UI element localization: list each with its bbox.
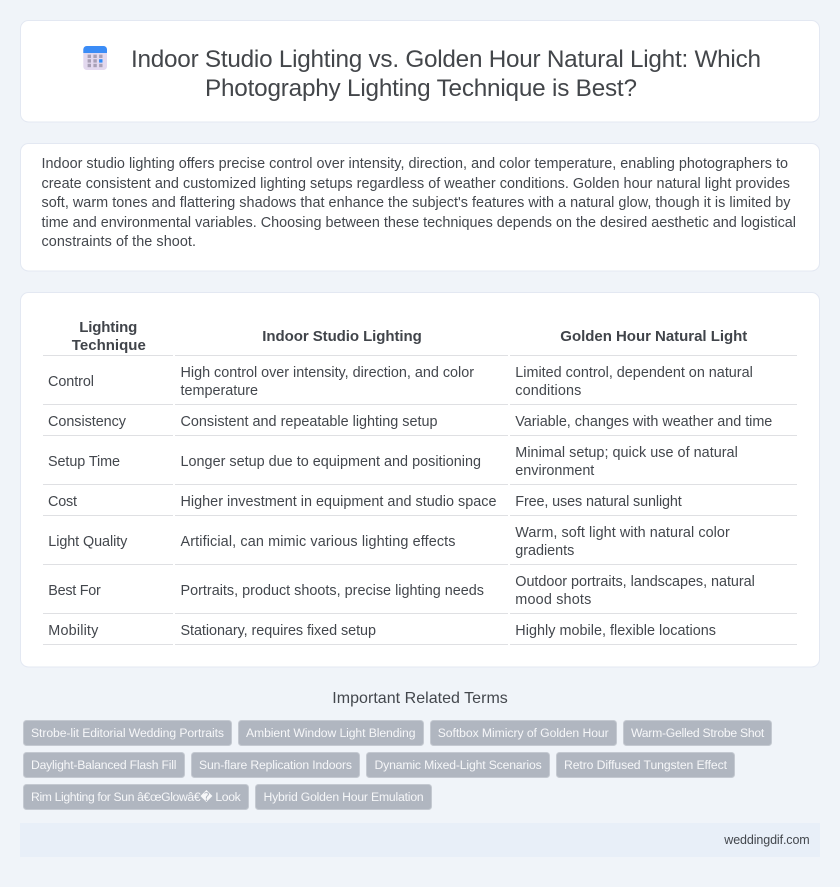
- panel: introduction text: constraints of the shoot.: [42, 234, 196, 250]
- title: Photography Lighting Technique is Best?: [205, 75, 637, 102]
- heading: important related terms: Important Related Terms: [332, 690, 508, 707]
- row: setup time: Minimal setup; quick use of natural: [515, 445, 738, 461]
- icon: calendar: [83, 46, 107, 70]
- row: control: conditions: [515, 383, 581, 399]
- row: consistency: Consistency: [48, 414, 127, 430]
- row: control: Control: [48, 374, 94, 390]
- tag: [430, 720, 616, 746]
- row: setup time: Longer setup due to equipment and positioning: [180, 454, 481, 470]
- row: consistency: [48, 414, 772, 430]
- tag: Sun-flare Replication Indoors: [199, 758, 352, 772]
- related terms tags: [24, 720, 772, 810]
- tag: [238, 720, 424, 746]
- row: mobility: Mobility: [48, 623, 99, 639]
- tag: [366, 752, 550, 778]
- row: mobility: [48, 623, 716, 639]
- row: light quality: Light Quality: [48, 534, 128, 550]
- tag: [624, 720, 772, 746]
- panel: introduction text: [20, 144, 820, 271]
- tag: [192, 752, 360, 778]
- tag: Retro Diffused Tungsten Effect: [564, 758, 728, 772]
- row: cost: Higher investment in equipment and studio space: [180, 494, 496, 510]
- tag: [24, 720, 232, 746]
- row: consistency: Variable, changes with weather and time: [515, 414, 772, 430]
- row: control: Limited control, dependent on natural: [515, 365, 753, 381]
- tag: Strobe-lit Editorial Wedding Portraits: [31, 726, 224, 740]
- row: cost: [48, 494, 682, 510]
- row: setup time: environment: [515, 463, 594, 479]
- tag: Softbox Mimicry of Golden Hour: [438, 726, 609, 740]
- tag: [556, 752, 734, 778]
- tag: Warm-Gelled Strobe Shot: [631, 726, 765, 740]
- row: light quality: Artificial, can mimic various lighting effects: [180, 534, 456, 550]
- tag: Hybrid Golden Hour Emulation: [264, 790, 424, 804]
- row: control: [48, 365, 753, 399]
- panel: introduction text: create consistent and customized lighting setups regardless of weather conditions. Golden hour natural light provides: [42, 176, 790, 192]
- table header row: Technique: [72, 337, 146, 354]
- tag: [256, 784, 432, 810]
- row: best for: Outdoor portraits, landscapes, natural: [515, 574, 755, 590]
- row: consistency: Consistent and repeatable lighting setup: [180, 414, 438, 430]
- row: mobility: Highly mobile, flexible locations: [515, 623, 716, 639]
- panel: header: [20, 20, 820, 122]
- row: light quality: [48, 525, 730, 559]
- panel: introduction text: time and environmental variables. Choosing between these techniques depends on the desired aesthetic and logistical: [42, 215, 796, 231]
- row: cost: Free, uses natural sunlight: [515, 494, 682, 510]
- row: cost: Cost: [48, 494, 77, 510]
- row: control: temperature: [180, 383, 258, 399]
- panel: introduction text: soft, warm tones and flattering shadows that enhance the subject's features with a natural glow, though it is limited by: [42, 195, 791, 211]
- footer bar: weddingdif.com: [723, 833, 810, 847]
- row: light quality: Warm, soft light with natural color: [515, 525, 730, 541]
- tag: Ambient Window Light Blending: [246, 726, 416, 740]
- panel: comparison table: [20, 292, 820, 667]
- table header row: [72, 319, 747, 354]
- row: light quality: gradients: [515, 543, 574, 559]
- row: best for: Best For: [48, 583, 101, 599]
- table header row: Golden Hour Natural Light: [560, 328, 747, 345]
- tag: Rim Lighting for Sun â€œGlowâ€� Look: [31, 790, 242, 804]
- tag: Daylight-Balanced Flash Fill: [31, 758, 176, 772]
- tag: Dynamic Mixed-Light Scenarios: [374, 758, 542, 772]
- row: setup time: [48, 445, 738, 479]
- row: best for: mood shots: [515, 592, 591, 608]
- tag: [24, 784, 248, 810]
- title: [131, 46, 761, 102]
- tag: [24, 752, 184, 778]
- row: setup time: Setup Time: [48, 454, 120, 470]
- row: control: High control over intensity, direction, and color: [180, 365, 474, 381]
- row: best for: [48, 574, 755, 608]
- row: best for: Portraits, product shoots, precise lighting needs: [180, 583, 484, 599]
- table header row: Lighting: [79, 319, 137, 336]
- row: mobility: Stationary, requires fixed setup: [180, 623, 376, 639]
- table header row: Indoor Studio Lighting: [262, 328, 422, 345]
- panel: introduction text: Indoor studio lighting offers precise control over intensity, direction, and color temperature, enabling photographers to: [42, 156, 788, 172]
- footer bar: [20, 823, 820, 857]
- title: Indoor Studio Lighting vs. Golden Hour Natural Light: Which: [131, 46, 761, 73]
